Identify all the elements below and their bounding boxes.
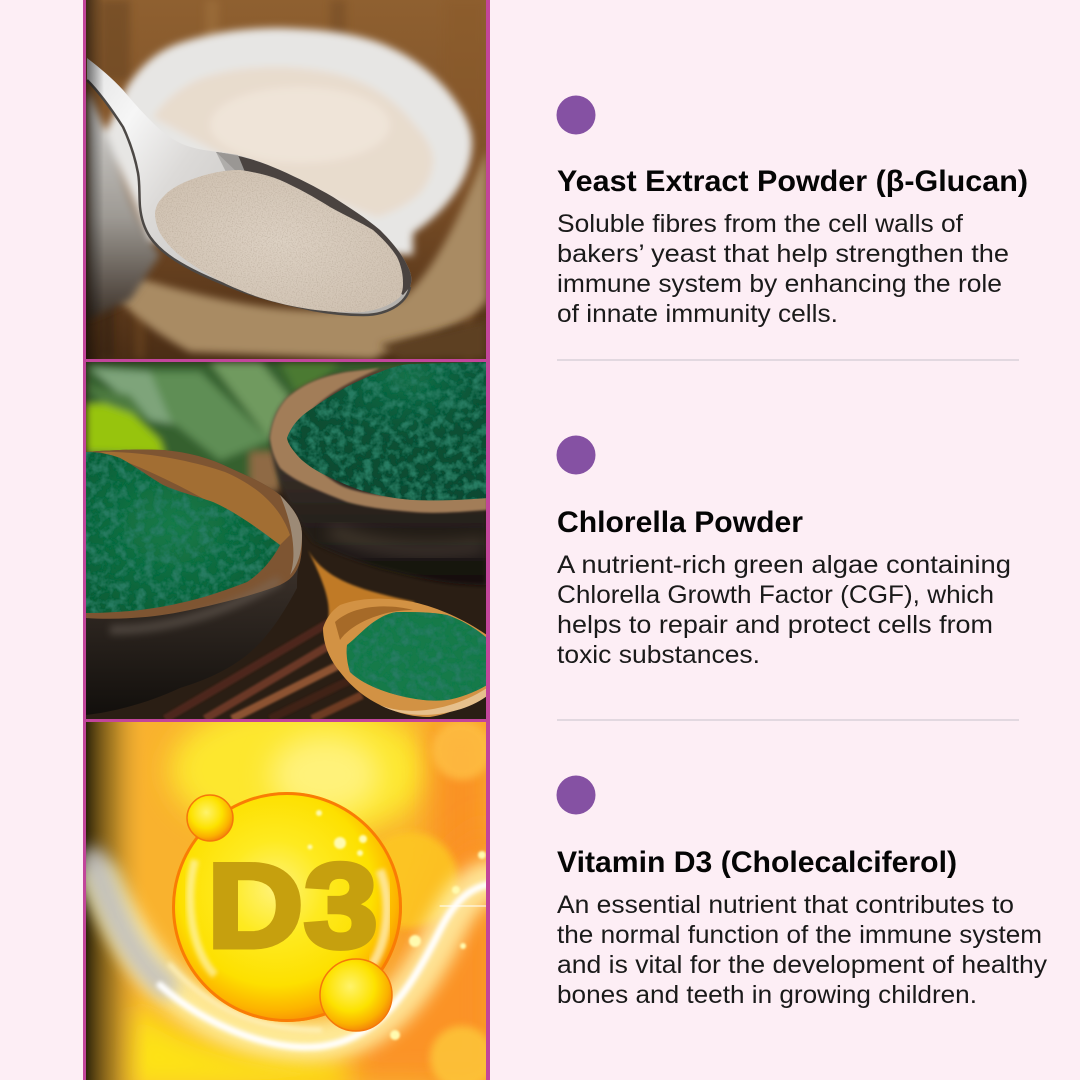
heading: Yeast Extract Powder (β-Glucan) (557, 165, 1028, 198)
description: A nutrient-rich green algae containing (557, 551, 1011, 579)
description (557, 551, 1011, 669)
heading: Chlorella Powder (557, 506, 803, 539)
photo: yeast powder on a spoon with bowl (86, 0, 487, 359)
divider: frame bar between photos (83, 719, 490, 722)
description: toxic substances. (557, 641, 760, 669)
sparkles (308, 810, 486, 1040)
front bowl (86, 450, 302, 715)
spoon (87, 58, 411, 315)
description: immune system by enhancing the role (557, 270, 1002, 298)
description (557, 891, 1048, 1009)
small orb top (187, 795, 233, 841)
description: Chlorella Growth Factor (CGF), which (557, 581, 994, 609)
heading: Vitamin D3 (Cholecalciferol) (557, 846, 957, 879)
description: the normal function of the immune system (557, 921, 1042, 949)
bullet dot (556, 776, 596, 814)
background glow (86, 700, 494, 1080)
burlap cloth (100, 150, 487, 359)
white bowl (87, 28, 472, 320)
bullet dot (556, 96, 596, 134)
bullet dot (556, 436, 596, 474)
wooden spoon handle (308, 551, 416, 619)
panel: photo column frame (83, 0, 490, 1080)
ingredient 3: vitamin D3 (556, 776, 1048, 1009)
blurred leaves (86, 362, 486, 492)
D3 label: D3 (207, 839, 378, 973)
description: bones and teeth in growing children. (557, 981, 977, 1009)
back bowl (270, 362, 487, 585)
light wave (94, 860, 490, 1047)
description: helps to repair and protect cells from (557, 611, 993, 639)
photo: chlorella powder in bowls (86, 362, 487, 719)
description: Soluble fibres from the cell walls of (557, 210, 963, 238)
description: An essential nutrient that contributes to (557, 891, 1014, 919)
small orb bottom (320, 959, 392, 1031)
description: and is vital for the development of healthy (557, 951, 1048, 979)
description (557, 210, 1009, 328)
ingredient 2: chlorella (556, 436, 1011, 669)
description: of innate immunity cells. (557, 300, 838, 328)
bamboo mat (165, 622, 362, 719)
photo: vitamin D3 capsule illustration (86, 700, 494, 1080)
yeast powder (155, 170, 403, 312)
large orb (172, 792, 402, 1022)
description: bakers’ yeast that help strengthen the (557, 240, 1009, 268)
ingredient 1: yeast extract (556, 96, 1028, 328)
small spoon with powder (323, 599, 487, 717)
divider: frame bar between photos (83, 359, 490, 362)
